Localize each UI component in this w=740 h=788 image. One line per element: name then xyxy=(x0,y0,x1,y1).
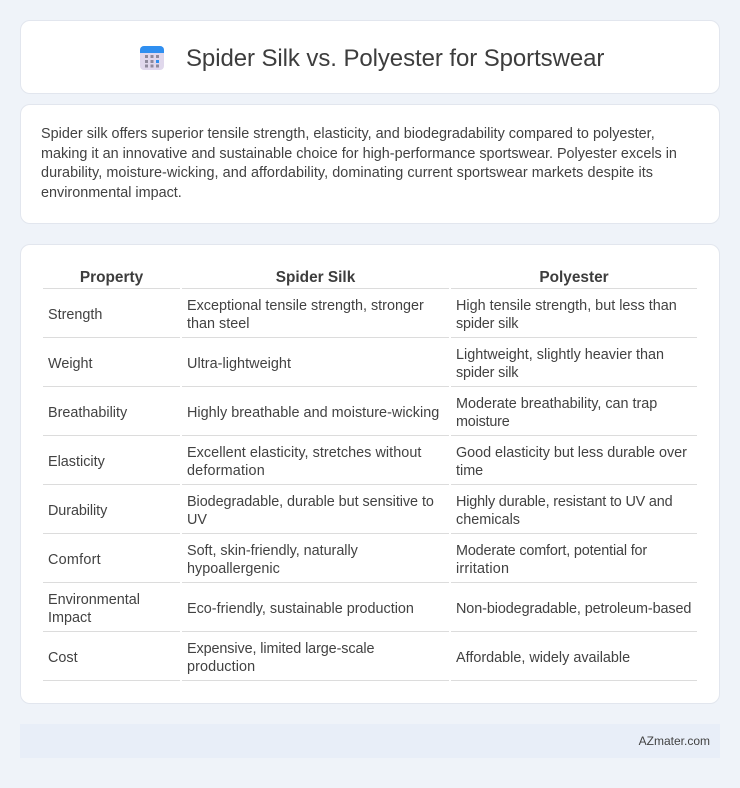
summary text: making it an innovative and sustainable choice for high-performance sportswear. Polyester excels in xyxy=(41,146,677,162)
row: durability: Biodegradable, durable but sensitive to xyxy=(187,494,434,510)
row: comfort: Comfort xyxy=(48,552,101,568)
table header: Property xyxy=(80,269,143,286)
row: strength: High tensile strength, but less than xyxy=(456,298,677,314)
row: comfort: hypoallergenic xyxy=(187,561,280,577)
row: weight: spider silk xyxy=(456,365,518,381)
icon: calendar xyxy=(140,46,164,70)
row: elasticity: Good elasticity but less durable over xyxy=(456,445,687,461)
row: cost: Cost xyxy=(48,650,78,666)
row: strength: spider silk xyxy=(456,316,518,332)
row: comfort: Moderate comfort, potential for xyxy=(456,543,647,559)
row: durability: Highly durable, resistant to UV and xyxy=(456,494,672,510)
row: elasticity: time xyxy=(456,463,483,479)
row: strength: than steel xyxy=(187,316,249,332)
row: durability: UV xyxy=(187,512,207,528)
summary text: Spider silk offers superior tensile strength, elasticity, and biodegradability compared to polyester, xyxy=(41,126,655,142)
summary card xyxy=(20,104,720,224)
row: cost: Affordable, widely available xyxy=(456,650,630,666)
row: weight: Ultra-lightweight xyxy=(187,356,291,372)
row: breathability: Moderate breathability, can trap xyxy=(456,396,657,412)
table card xyxy=(20,244,720,704)
row: comfort: irritation xyxy=(456,561,509,577)
summary text: environmental impact. xyxy=(41,185,182,201)
table header: Spider Silk xyxy=(276,269,355,286)
row: elasticity: Elasticity xyxy=(48,454,105,470)
row: elasticity: deformation xyxy=(187,463,265,479)
row: breathability: Highly breathable and moisture-wicking xyxy=(187,405,439,421)
row: strength: Exceptional tensile strength, stronger xyxy=(187,298,424,314)
row: environmental impact: Impact xyxy=(48,610,91,626)
row: weight: Weight xyxy=(48,356,93,372)
row: weight: Lightweight, slightly heavier than xyxy=(456,347,664,363)
row: cost: Expensive, limited large-scale xyxy=(187,641,374,657)
row: comfort: Soft, skin-friendly, naturally xyxy=(187,543,358,559)
footer bar xyxy=(20,724,720,758)
row: durability: chemicals xyxy=(456,512,520,528)
title: Spider Silk vs. Polyester for Sportswear xyxy=(186,45,604,72)
row: cost: production xyxy=(187,659,255,675)
row: breathability: Breathability xyxy=(48,405,127,421)
row: environmental impact: Eco-friendly, sustainable production xyxy=(187,601,414,617)
table header: Polyester xyxy=(539,269,609,286)
row: strength: Strength xyxy=(48,307,102,323)
header card xyxy=(20,20,720,94)
row: environmental impact: Environmental xyxy=(48,592,140,608)
row: elasticity: Excellent elasticity, stretches without xyxy=(187,445,421,461)
row: breathability: moisture xyxy=(456,414,510,430)
row: environmental impact: Non-biodegradable, petroleum-based xyxy=(456,601,691,617)
summary text xyxy=(41,126,677,201)
row: durability: Durability xyxy=(48,503,107,519)
summary text: durability, moisture-wicking, and affordability, dominating current sportswear markets despite its xyxy=(41,165,653,181)
footer credit: AZmater.com xyxy=(639,734,710,748)
